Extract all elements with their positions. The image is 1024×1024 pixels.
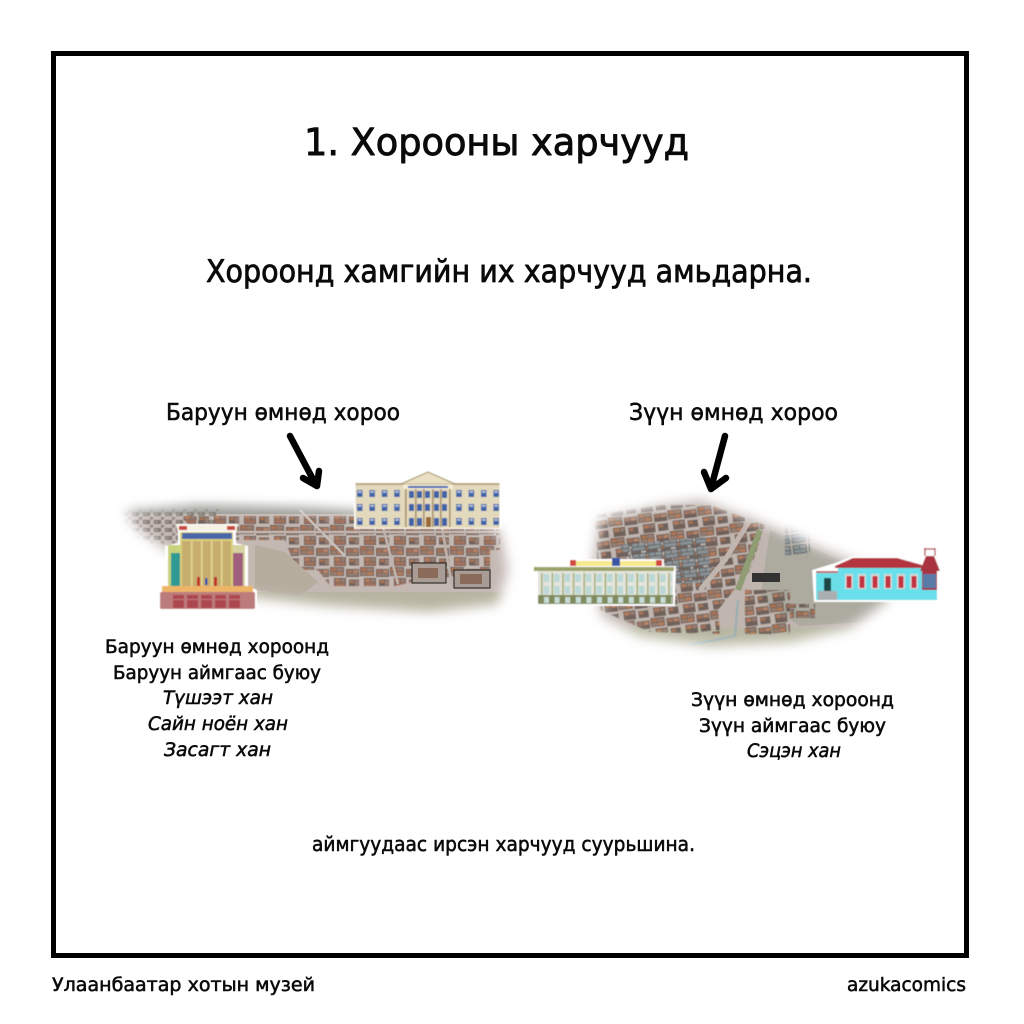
icon: long green and white building <box>534 558 676 606</box>
comic panel frame <box>54 54 966 956</box>
text block: south-east khoroo settlers: Сэцэн хан <box>747 741 841 762</box>
icon: beige museum building <box>354 472 501 529</box>
heading: south-east khoroo: Зүүн өмнөд хороо <box>629 400 838 426</box>
arrow: to south-east map <box>704 436 726 489</box>
subtitle: Хороонд хамгийн их харчууд амьдарна. <box>206 254 812 290</box>
text block: south-east khoroo settlers: Зүүн аймгаас буюу <box>699 716 886 737</box>
text block: south-west khoroo settlers <box>105 637 329 761</box>
arrow: to south-west map <box>290 436 319 486</box>
text block: south-west khoroo settlers: Түшээт хан <box>163 688 273 709</box>
heading: south-west khoroo: Баруун өмнөд хороо <box>166 400 400 426</box>
footer: author: azukacomics <box>847 974 966 996</box>
text block: south-west khoroo settlers: Баруун өмнөд хороонд <box>105 637 329 658</box>
text block: south-west khoroo settlers: Баруун аймгаас буюу <box>113 663 321 684</box>
icon: turquoise building with red roof <box>812 546 941 602</box>
icon: yellow theatre building <box>158 524 257 610</box>
text block: south-east khoroo settlers <box>691 690 894 762</box>
text block: south-east khoroo settlers: Зүүн өмнөд хороонд <box>691 690 894 711</box>
map: south-east district <box>586 494 892 654</box>
title: 1. Хорооны харчууд <box>304 121 689 164</box>
closing sentence: аймгуудаас ирсэн харчууд суурьшина. <box>312 832 695 856</box>
map: south-west district <box>122 498 514 619</box>
text block: south-west khoroo settlers: Сайн ноён хан <box>148 714 288 735</box>
footer: source: Улаанбаатар хотын музей <box>52 974 315 996</box>
text block: south-west khoroo settlers: Засагт хан <box>164 740 271 761</box>
